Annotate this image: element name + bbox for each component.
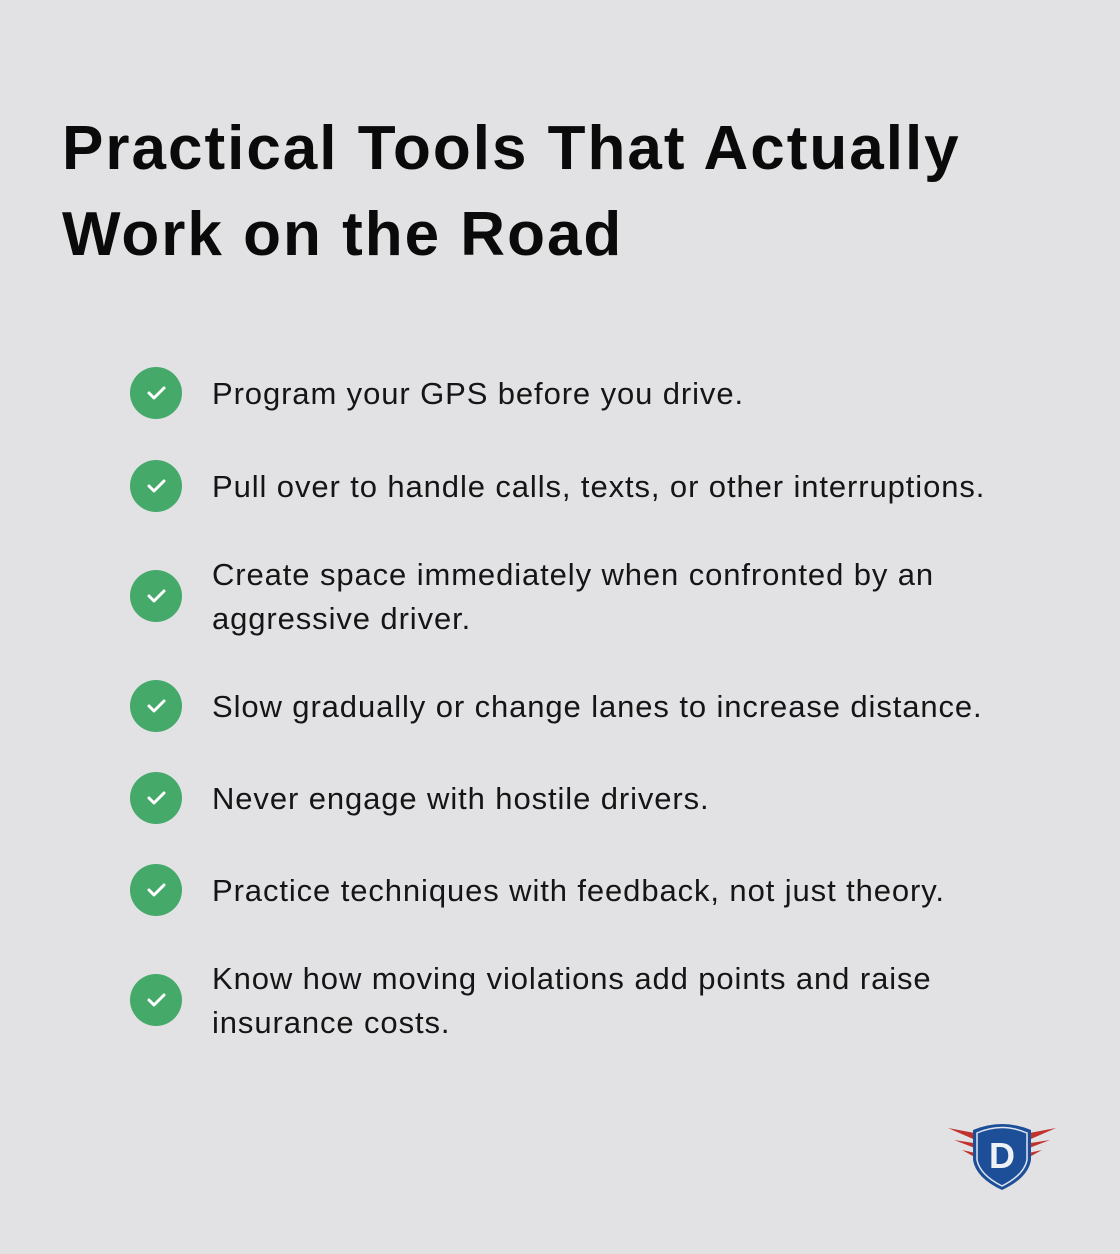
item 2: Pull over to handle calls, texts, or other interruptions.: [212, 469, 985, 504]
item 7: [130, 961, 932, 1040]
item 7: insurance costs.: [212, 1005, 450, 1040]
item 5: Never engage with hostile drivers.: [212, 781, 710, 816]
item 3: Create space immediately when confronted by an: [212, 557, 934, 592]
item 6: [130, 864, 945, 916]
title: [62, 114, 961, 269]
item 2: [130, 460, 985, 512]
item 7: Know how moving violations add points and raise: [212, 961, 932, 996]
title: Work on the Road: [62, 200, 623, 269]
logo: D: [989, 1135, 1015, 1176]
item 5: [130, 772, 710, 824]
item 3: aggressive driver.: [212, 601, 471, 636]
item 1: [130, 367, 744, 419]
item 1: Program your GPS before you drive.: [212, 376, 744, 411]
logo: [948, 1124, 1056, 1190]
item 4: Slow gradually or change lanes to increase distance.: [212, 689, 983, 724]
item 6: Practice techniques with feedback, not just theory.: [212, 873, 945, 908]
item 3: [130, 557, 934, 636]
item 4: [130, 680, 983, 732]
title: Practical Tools That Actually: [62, 114, 961, 183]
